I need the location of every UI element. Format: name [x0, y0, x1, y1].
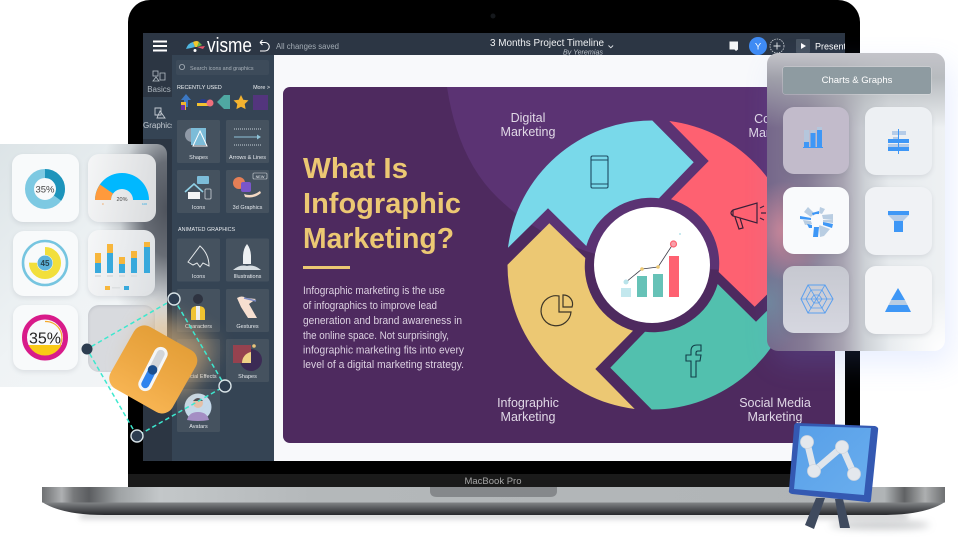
tile: characters: Characters [185, 324, 212, 330]
tile: special effects: Special Effects [180, 374, 217, 380]
tile: pyramid chart [865, 266, 932, 334]
laptop base [42, 487, 945, 515]
tile: special effects [188, 339, 220, 382]
body text: of infographics to improve lead [303, 300, 437, 312]
body text: infographic marketing fits into every [303, 344, 464, 356]
toolbar [143, 33, 847, 57]
slider control [136, 344, 170, 394]
tile: shapes: Shapes [189, 155, 208, 161]
left icon rail [143, 55, 175, 461]
body text: generation and brand awareness in [303, 315, 462, 327]
trend nodes [800, 436, 860, 480]
present button: Present [815, 42, 847, 52]
title [303, 153, 461, 255]
tile: gestures: Gestures [236, 324, 259, 330]
title rule [303, 266, 350, 269]
recently used heading: RECENTLY USED [177, 85, 222, 91]
segment: content [669, 121, 797, 307]
title: What Is [303, 153, 408, 185]
tile: animated icons: Icons [192, 274, 205, 280]
icon: graphics [155, 108, 165, 118]
tile: gestures [226, 289, 269, 332]
animated graphics heading: ANIMATED GRAPHICS [178, 227, 236, 233]
panel heading [783, 67, 931, 94]
tile: stacked bar chart [88, 230, 155, 296]
tile: radial chart [783, 187, 849, 254]
body text [303, 285, 464, 371]
orange tile [105, 321, 202, 418]
tile: gauge chart: 100 [142, 202, 147, 206]
tile: gantt chart [865, 107, 932, 175]
tile: timer chart: 45 [41, 259, 50, 268]
tile: animated shapes [226, 339, 269, 382]
save status: All changes saved [276, 42, 339, 51]
handles [168, 293, 180, 305]
tile: avatars [177, 389, 220, 432]
label: content marketing: Content [754, 112, 798, 126]
label: digital marketing: Digital [511, 111, 545, 125]
tile: percentage ring [13, 305, 78, 370]
icon: megaphone [731, 203, 766, 229]
easel board [789, 423, 878, 502]
rail label: graphics: Graphics [143, 121, 175, 130]
label: content marketing: Marketing [749, 126, 803, 140]
body text: the online space. Not surprisingly, [303, 330, 449, 342]
tile: donut chart: 35% [35, 184, 55, 196]
chevron [608, 46, 613, 48]
icon: phone [591, 156, 608, 188]
tile: gauge chart: 20% [116, 197, 128, 203]
label: infographic marketing: Marketing [501, 410, 555, 424]
label: digital marketing [501, 111, 555, 139]
tile: illustrations [226, 238, 269, 282]
icon: facebook [686, 345, 701, 377]
label: social media marketing [739, 396, 811, 424]
easel shadow [830, 521, 930, 529]
panel: charts and graphs (right) [767, 53, 945, 351]
tile: illustrations: Illustrations [234, 274, 262, 280]
panel: chart types (left) [0, 144, 167, 387]
tile: 3d graphics: NEW [256, 175, 265, 179]
easel icon [789, 423, 930, 529]
sidebar panel [172, 55, 274, 461]
trend line [807, 442, 854, 474]
tile: shapes [177, 120, 220, 163]
document title: 3 Months Project Timeline [490, 38, 604, 49]
notch [430, 487, 557, 497]
avatar: Y [755, 42, 762, 52]
label: digital marketing: Marketing [501, 125, 555, 139]
tile: animated icons [177, 238, 220, 282]
laptop lid [128, 0, 860, 488]
infographic card [283, 87, 835, 443]
title: Marketing? [303, 223, 454, 255]
tile: 3d graphics [226, 170, 269, 213]
selection box [87, 299, 225, 436]
lower lid strip [845, 340, 860, 474]
tile: arrows and lines: Arrows & Lines [229, 155, 266, 161]
segment: infographic [507, 223, 635, 409]
label: social media marketing: Social Media [739, 396, 811, 410]
laptop chin [128, 474, 860, 487]
rail label: basics: Basics [147, 85, 171, 94]
label: content marketing [749, 112, 803, 140]
center chart [621, 233, 681, 297]
present button [796, 39, 847, 53]
panel heading: Charts & Graphs [822, 75, 892, 86]
tile: icons [177, 170, 220, 213]
tile: radar chart [783, 266, 849, 333]
tile: arrows and lines [226, 120, 269, 163]
tile: gauge chart [88, 154, 156, 222]
wheel [507, 120, 797, 410]
more link: More > [253, 85, 270, 91]
laptop shadow [80, 513, 908, 519]
tile: funnel chart [865, 187, 932, 255]
tile: percentage ring: 35% [29, 330, 61, 348]
camera [490, 14, 496, 18]
icon: basics [153, 71, 165, 81]
comments icon [730, 42, 738, 51]
tile: empty slot [88, 305, 155, 372]
label: infographic marketing [497, 396, 559, 424]
tile: gauge chart: 0 [102, 202, 104, 206]
segment: social [610, 282, 796, 410]
tile: characters [177, 289, 220, 332]
body text: Infographic marketing is the use [303, 285, 445, 297]
segment: digital [508, 120, 694, 248]
canvas background [274, 55, 845, 461]
center circle [594, 207, 710, 323]
label: social media marketing: Marketing [748, 410, 802, 424]
tile: 3d graphics: 3d Graphics [233, 205, 263, 211]
tile: avatars: Avatars [189, 424, 208, 430]
easel legs [805, 498, 825, 529]
body text: level of a digital marketing strategy. [303, 359, 464, 371]
visme logo: visme [207, 35, 252, 57]
author: By Yeremias [563, 48, 603, 56]
label: infographic marketing: Infographic [497, 396, 559, 410]
orange slider widget [82, 293, 231, 442]
tile: animated shapes: Shapes [238, 374, 257, 380]
add collaborator [770, 39, 784, 53]
tile: bar chart [783, 107, 849, 174]
avatar [749, 37, 767, 55]
search box: Search icons and graphics [190, 66, 254, 72]
visme logo [186, 37, 252, 52]
recently used icons [181, 94, 268, 110]
model label: MacBook Pro [464, 476, 522, 487]
tile: donut chart [12, 154, 79, 222]
screen [143, 33, 860, 474]
icon: pie chart [541, 295, 573, 326]
undo icon [260, 40, 269, 51]
tile: timer chart [13, 231, 78, 296]
tile: icons: Icons [192, 205, 205, 211]
search box [179, 64, 254, 71]
tile glow [124, 309, 216, 399]
hamburger menu [153, 42, 167, 50]
title: Infographic [303, 188, 461, 220]
